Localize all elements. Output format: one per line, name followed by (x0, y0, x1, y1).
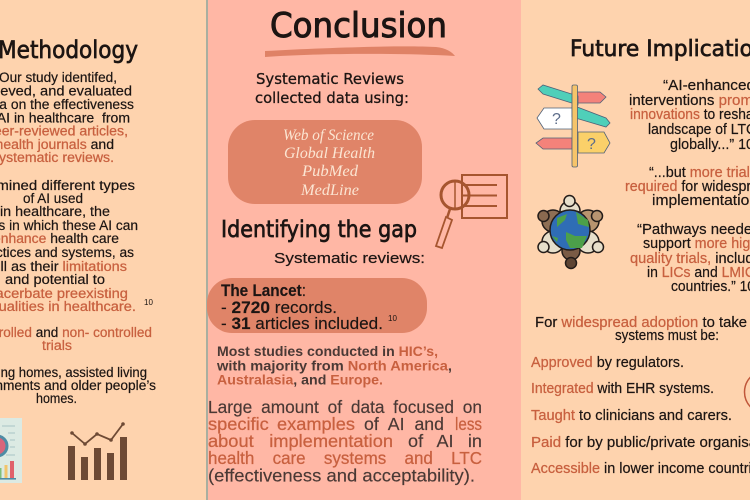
callout: databases: Web of Science (283, 127, 374, 144)
heading: Identifying the gap: Identifying the gap (221, 217, 417, 243)
icon: people around globe (538, 196, 604, 268)
text block: settings (0, 365, 156, 406)
icon: signpost: ? (552, 111, 561, 128)
icon: signpost: ? (587, 136, 596, 153)
callout: databases: PubMed (301, 163, 358, 180)
text block: study locations: with majority from North America , (216, 358, 452, 374)
heading underline brush stroke (265, 46, 455, 57)
text block: systematic reviews intro: collected data using: (255, 89, 409, 107)
text block: systematic reviews intro: Systematic Reviews (256, 70, 404, 88)
text block: adoption intro: systems must be: (615, 328, 719, 344)
text block: types of AI examined: in healthcare, the (0, 204, 110, 219)
text block: types of AI examined: 10 (144, 298, 153, 307)
text block: data gap: less (455, 414, 482, 434)
text block: study scope: Our study identifed, (0, 70, 117, 85)
panel: methodology background (0, 0, 207, 500)
callout: databases (228, 120, 422, 204)
text block: study locations (216, 343, 452, 388)
callout: The Lancet: 10 (388, 314, 397, 323)
heading: Methodology: Methodology (0, 36, 138, 64)
callout: databases: MedLine (300, 182, 359, 199)
text block: more trials quote (625, 165, 750, 209)
panel: conclusion background (208, 0, 521, 500)
panel: future implications (531, 37, 750, 477)
text block: more trials quote: implementation (652, 193, 750, 209)
text block: data gap: Large amount of data focused on (208, 397, 482, 417)
panel: methodology (0, 36, 156, 483)
list: adoption requirements: Integrated with EHR systems. (531, 381, 714, 397)
text block: data gap: health care systems and LTC (208, 448, 482, 468)
text block: study locations: Most studies conducted in HIC’s, (217, 343, 438, 359)
text block: AI-enhanced quote (629, 78, 750, 153)
text block: types of AI examined (0, 178, 153, 314)
list: adoption requirements (531, 355, 750, 477)
text block: settings: homes. (36, 391, 77, 406)
callout: The Lancet (207, 278, 427, 333)
text block: AI-enhanced quote: “AI-enhanced (663, 78, 750, 94)
text block: trial types (0, 325, 152, 353)
text block: data gap (208, 397, 482, 486)
text block: data gap: specific examples (208, 414, 355, 434)
callout: The Lancet: The Lancet: (221, 282, 306, 300)
icon: circle at right edge (744, 370, 750, 414)
panel: conclusion (207, 6, 507, 486)
callout: The Lancet: - 31 articles included. (221, 315, 383, 333)
text block: types of AI examined: of AI used (23, 191, 83, 206)
text block: study scope (0, 70, 134, 165)
text block: pathways quote (630, 222, 750, 295)
text block: data gap: of AI in (408, 431, 482, 451)
text block: systematic reviews intro (255, 70, 409, 107)
text: systematic reviews label: Systematic reviews: (274, 251, 425, 267)
list: adoption requirements: Approved by regulators. (531, 355, 684, 371)
heading: Conclusion: Conclusion (270, 6, 447, 46)
icon: signpost (536, 85, 610, 167)
icon: report with charts (0, 418, 22, 483)
panel: future implications background (521, 0, 750, 500)
callout: databases: Global Health (284, 145, 375, 162)
icon: bar and line chart (68, 422, 127, 480)
text block: trial types: trials (42, 338, 72, 353)
text block: study locations: Australasia, and Europe. (217, 372, 383, 388)
text block: types of AI examined: and potential to (5, 272, 105, 287)
list: adoption requirements: Taught to clinicians and carers. (531, 408, 732, 424)
text block: data gap: (effectiveness and acceptability). (208, 466, 475, 486)
text block: data gap: about implementation (208, 431, 393, 451)
text block: adoption intro (535, 315, 747, 344)
icon: magnifying glass over document (436, 175, 507, 248)
callout: The Lancet: - 2720 records. (221, 299, 337, 317)
text block: data gap: of AI and (364, 414, 444, 434)
text block: adoption intro: For widespread adoption to take (535, 315, 747, 331)
